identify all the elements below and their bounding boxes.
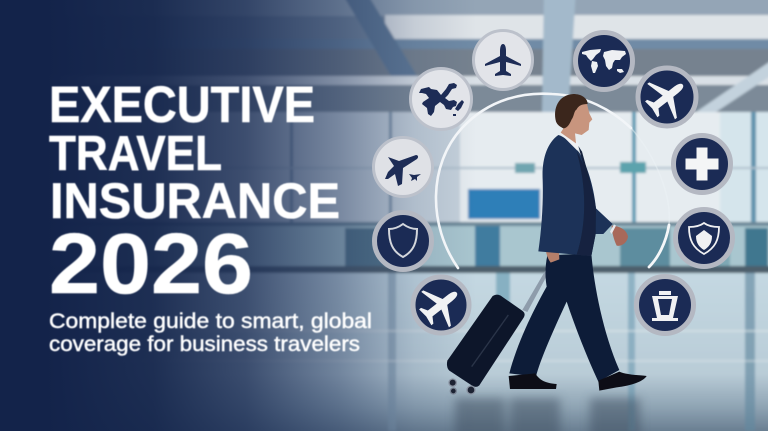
icon: airplane top — [474, 30, 532, 90]
suitcase — [447, 295, 525, 394]
jacket — [538, 135, 613, 256]
title: EXECUTIVE — [49, 76, 315, 133]
traveler with suitcase — [447, 94, 647, 394]
title — [49, 76, 340, 312]
icon: airplane lower left — [411, 275, 471, 335]
icon: world map — [576, 32, 632, 90]
neck and face — [561, 100, 592, 143]
suitcase handle — [522, 263, 553, 312]
subtitle — [49, 310, 372, 356]
subtitle: Complete guide to smart, global — [49, 310, 372, 333]
icon: scattered planes map — [410, 68, 472, 130]
floor reflections — [455, 398, 640, 431]
shirt cuffs — [546, 224, 616, 247]
icon: shield filled — [676, 210, 732, 266]
icon: airplane upper right — [637, 67, 697, 127]
hands — [546, 245, 559, 263]
icon: shield outline — [374, 212, 432, 270]
icon: airplane with small plane — [374, 138, 432, 196]
shoes — [509, 373, 557, 389]
trousers — [509, 253, 619, 382]
icon: medical cross — [674, 136, 730, 192]
shirt collar and tie — [559, 131, 579, 151]
protective arc — [436, 94, 669, 268]
title: INSURANCE — [50, 173, 340, 229]
hair — [555, 94, 588, 128]
title: TRAVEL — [49, 127, 222, 181]
subtitle: coverage for business travelers — [49, 333, 360, 356]
windows — [0, 112, 768, 230]
floor — [0, 273, 768, 431]
railing and concourse — [0, 222, 768, 273]
ceiling — [0, 0, 768, 115]
icon: luggage — [636, 276, 694, 334]
title: 2026 — [49, 217, 253, 312]
